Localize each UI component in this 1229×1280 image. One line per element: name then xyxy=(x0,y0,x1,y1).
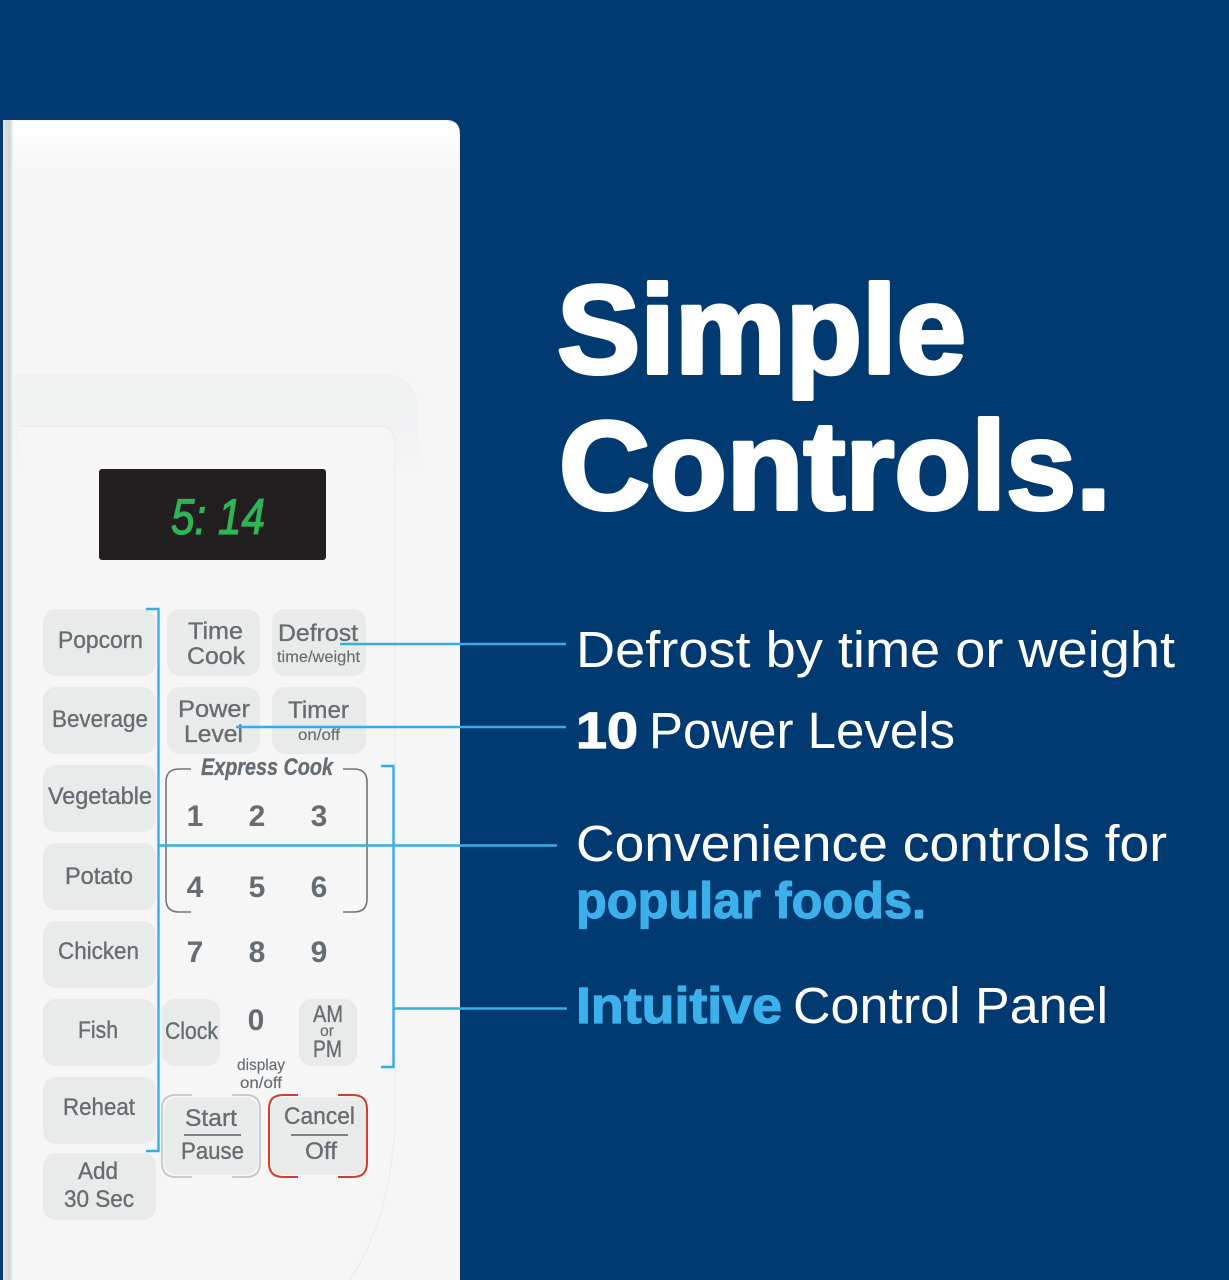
cancel off button xyxy=(269,1095,367,1177)
AM or PM button: AM xyxy=(313,1001,343,1028)
display on/off label: on/off xyxy=(240,1075,283,1092)
callout text: power levels: Power Levels xyxy=(649,702,955,759)
panel body xyxy=(3,120,460,1280)
AM or PM button: or xyxy=(320,1023,335,1040)
display on/off label: display xyxy=(237,1057,285,1074)
number keypad: 6 xyxy=(311,871,327,904)
start pause button: Pause xyxy=(181,1138,244,1165)
clock button xyxy=(162,999,220,1066)
callout lines xyxy=(146,609,567,1151)
buttons: food column: Reheat xyxy=(63,1094,135,1121)
buttons: time and power: Timer xyxy=(288,697,349,724)
buttons: food column: 30 Sec xyxy=(64,1186,134,1213)
number keypad: 8 xyxy=(249,936,265,969)
clock button: Clock xyxy=(165,1018,219,1045)
callout text: defrost: Defrost by time or weight xyxy=(576,621,1175,678)
buttons: food column: Add xyxy=(78,1158,118,1185)
title: Controls. xyxy=(559,397,1111,536)
express cook bracket: Express Cook xyxy=(201,754,334,781)
buttons: food column: Popcorn xyxy=(58,627,143,654)
title xyxy=(557,261,1111,536)
buttons: food column: Fish xyxy=(78,1017,118,1044)
buttons: time and power: Cook xyxy=(187,643,246,670)
AM or PM button: PM xyxy=(313,1036,342,1063)
buttons: time and power xyxy=(167,609,366,754)
callout text: intuitive control panel: Intuitive xyxy=(576,977,782,1034)
cancel off button: Off xyxy=(305,1138,337,1165)
start pause button: Start xyxy=(185,1105,237,1132)
buttons: food column xyxy=(43,609,156,1220)
buttons: time and power: time/weight xyxy=(277,649,361,666)
number keypad: 2 xyxy=(249,800,265,833)
buttons: food column: Potato xyxy=(65,863,133,890)
display: 5: 14 xyxy=(171,489,265,545)
buttons: time and power: Time xyxy=(188,618,243,645)
buttons: food column: Beverage xyxy=(52,706,148,733)
number keypad: 4 xyxy=(187,871,204,904)
buttons: time and power: Power xyxy=(178,696,250,723)
display on/off label xyxy=(237,1057,285,1092)
start pause button xyxy=(162,1095,260,1177)
callout text: intuitive control panel xyxy=(576,977,1108,1034)
cancel off button: Cancel xyxy=(284,1103,355,1130)
panel: microwave control panel xyxy=(3,120,460,1280)
callout text: intuitive control panel: Control Panel xyxy=(793,977,1108,1034)
number keypad xyxy=(187,800,327,1037)
callout text: convenience controls: Convenience controls for xyxy=(576,815,1167,872)
number keypad: 1 xyxy=(187,800,203,833)
buttons: food column: Vegetable xyxy=(48,783,152,810)
callout text: power levels: 10 xyxy=(576,702,638,759)
buttons: time and power: on/off xyxy=(298,727,341,744)
number keypad: 7 xyxy=(187,936,203,969)
display xyxy=(99,469,326,560)
title: Simple xyxy=(557,261,966,400)
buttons: time and power: Level xyxy=(184,721,243,748)
number keypad: 5 xyxy=(249,871,265,904)
number keypad: 0 xyxy=(248,1004,264,1037)
callout text: convenience controls: popular foods. xyxy=(576,872,926,929)
AM or PM button xyxy=(299,999,357,1066)
callout text: convenience controls xyxy=(576,815,1167,929)
buttons: food column: Chicken xyxy=(58,938,139,965)
buttons: time and power: Defrost xyxy=(278,620,358,647)
number keypad: 9 xyxy=(311,936,327,969)
express cook bracket xyxy=(166,754,367,912)
number keypad: 3 xyxy=(311,800,327,833)
